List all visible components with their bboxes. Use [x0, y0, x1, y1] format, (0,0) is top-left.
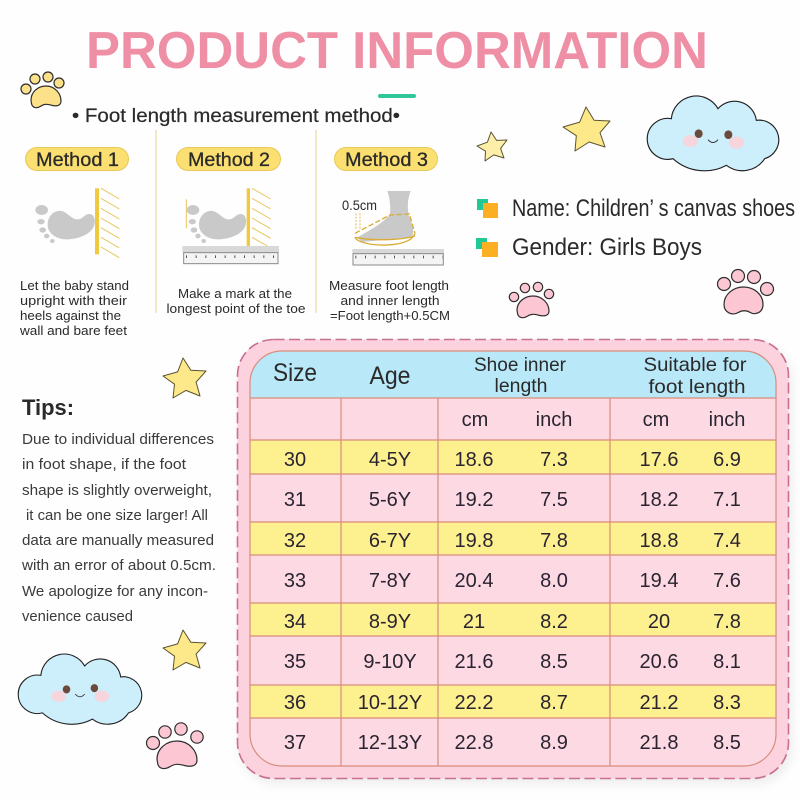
- method 3 text: and inner length: [340, 294, 440, 308]
- size row 34: 34: [284, 611, 306, 633]
- title: PRODUCT INFORMATION: [86, 22, 708, 80]
- size row 36: 8.3: [713, 692, 741, 714]
- size row 33: 20.4: [455, 570, 493, 592]
- size row 32: 7.8: [540, 530, 568, 552]
- size row 37: 12-13Y: [358, 732, 422, 754]
- method 2 text: longest point of the toe: [166, 302, 306, 316]
- subtitle: • Foot length measurement method•: [72, 106, 400, 127]
- method 2 text: [166, 287, 306, 316]
- size row 37: 8.5: [713, 732, 741, 754]
- method 3 text: [329, 279, 450, 323]
- size row 33: 19.4: [640, 570, 678, 592]
- size row 34: [284, 611, 741, 633]
- tips text: data are manually measured: [22, 533, 214, 549]
- icon: small star: [477, 132, 507, 161]
- tips heading: Tips:: [22, 395, 74, 420]
- size row 33: 33: [284, 570, 306, 592]
- size row 30: 30: [284, 449, 306, 471]
- icon: star lower: [163, 630, 206, 670]
- size row 32: 19.8: [455, 530, 493, 552]
- size row 34: 8-9Y: [369, 611, 411, 633]
- size row 33: [284, 570, 741, 592]
- table header: [273, 354, 747, 398]
- panel: method 2: [166, 148, 306, 316]
- size row 31: 7.5: [540, 489, 568, 511]
- table header: Suitable for: [644, 354, 747, 376]
- size row 30: 18.6: [455, 449, 493, 471]
- table header: foot length: [648, 376, 746, 398]
- size row 35: 9-10Y: [363, 651, 417, 673]
- product gender row: Gender: Girls Boys: [512, 234, 702, 261]
- icon: pink paw middle: [509, 282, 554, 318]
- size row 34: 20: [648, 611, 670, 633]
- size row 33: 7-8Y: [369, 570, 411, 592]
- unit row: inch: [536, 409, 572, 431]
- panel: method 3: [329, 148, 450, 323]
- method 1 badge: Method 1: [36, 150, 119, 171]
- divider: methods: [156, 130, 316, 313]
- method 2 badge: [176, 148, 280, 171]
- unit row: inch: [709, 409, 745, 431]
- icon: cloud bottom: [18, 654, 142, 724]
- size row 31: [284, 489, 741, 511]
- size row 36: 22.2: [455, 692, 493, 714]
- icon: foot with ruler: [182, 188, 279, 264]
- tips text: shape is slightly overweight,: [22, 483, 212, 499]
- icon: yellow paw: [21, 72, 64, 108]
- size row 32: 6-7Y: [369, 530, 411, 552]
- method 1 text: upright with their: [20, 294, 127, 308]
- tips text: venience caused: [22, 609, 133, 625]
- size row 35: 8.5: [540, 651, 568, 673]
- method 1 badge: [26, 148, 128, 171]
- method 3 text: Measure foot length: [329, 279, 449, 293]
- size row 36: 8.7: [540, 692, 568, 714]
- size row 35: 35: [284, 651, 306, 673]
- size row 36: 10-12Y: [358, 692, 422, 714]
- method 1 text: [19, 279, 129, 338]
- size row 31: 31: [284, 489, 306, 511]
- size row 31: 18.2: [640, 489, 678, 511]
- icon: shoe with inner length: [352, 191, 444, 265]
- size row 37: 21.8: [640, 732, 678, 754]
- method 1 text: wall and bare feet: [19, 324, 128, 338]
- size row 32: [284, 530, 741, 552]
- table header: Size: [273, 359, 317, 387]
- size row 37: 22.8: [455, 732, 493, 754]
- tips text: with an error of about 0.5cm.: [21, 558, 216, 574]
- size row 33: 7.6: [713, 570, 741, 592]
- 0.5cm label: 0.5cm: [342, 198, 377, 213]
- size row 34: 8.2: [540, 611, 568, 633]
- size row 32: 18.8: [640, 530, 678, 552]
- size row 33: 8.0: [540, 570, 568, 592]
- unit row: cm: [643, 409, 669, 431]
- tips text: in foot shape, if the foot: [22, 457, 186, 473]
- tips text: We apologize for any incon-: [22, 584, 208, 600]
- icon: pink paw right: [718, 270, 774, 314]
- size row 32: 7.4: [713, 530, 741, 552]
- size row 30: 7.3: [540, 449, 568, 471]
- unit row: cm: [462, 409, 488, 431]
- size row 30: 4-5Y: [369, 449, 411, 471]
- size row 35: 8.1: [713, 651, 741, 673]
- size row 34: 7.8: [713, 611, 741, 633]
- panel: method 1: [19, 148, 129, 338]
- method 1 text: heels against the: [20, 309, 121, 323]
- table header: length: [494, 375, 548, 397]
- size row 31: 5-6Y: [369, 489, 411, 511]
- method 3 badge: Method 3: [345, 150, 428, 171]
- size row 35: 20.6: [640, 651, 678, 673]
- icon: pink paw bottom: [146, 723, 203, 769]
- unit row: [462, 409, 745, 431]
- size row 36: [284, 692, 741, 714]
- tips text: [21, 432, 216, 625]
- size row 36: 36: [284, 692, 306, 714]
- size row 37: [284, 732, 741, 754]
- icon: star tips: [163, 358, 206, 398]
- icon: foot against wall: [35, 188, 119, 258]
- size row 34: 21: [463, 611, 485, 633]
- size row 30: 17.6: [640, 449, 678, 471]
- size row 31: 19.2: [455, 489, 493, 511]
- size row 37: 37: [284, 732, 306, 754]
- method 3 badge: [334, 148, 438, 171]
- table header: Shoe inner: [474, 354, 566, 376]
- accent bar: [378, 94, 416, 98]
- method 2 text: Make a mark at the: [178, 287, 292, 301]
- icon: large star: [563, 107, 610, 151]
- size row 32: 32: [284, 530, 306, 552]
- size row 35: 21.6: [455, 651, 493, 673]
- panel: size chart: [238, 340, 792, 784]
- size row 37: 8.9: [540, 732, 568, 754]
- table header: Age: [370, 362, 410, 390]
- size row 36: 21.2: [640, 692, 678, 714]
- method 2 badge: Method 2: [188, 150, 270, 171]
- tips text: it can be one size larger! All: [26, 508, 208, 524]
- tips text: Due to individual differences: [22, 432, 214, 448]
- method 1 text: Let the baby stand: [20, 279, 129, 293]
- size row 31: 7.1: [713, 489, 741, 511]
- icon: cloud top: [647, 96, 779, 171]
- size row 35: [284, 651, 741, 673]
- size row 30: 6.9: [713, 449, 741, 471]
- size row 30: [284, 449, 741, 471]
- method 3 text: =Foot length+0.5CM: [330, 309, 450, 323]
